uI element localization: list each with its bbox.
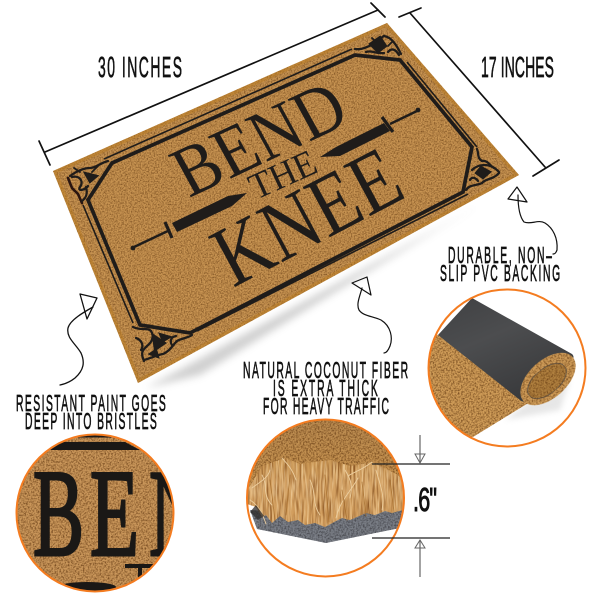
dimension line: 17 inches	[399, 8, 559, 176]
caption: fiber	[243, 357, 408, 419]
title word: KNEE: KNEE	[196, 128, 417, 305]
coir surface	[430, 334, 528, 437]
caption: paint: RESISTANT PAINT GOES	[16, 390, 166, 416]
detail circle: paint lettering	[16, 434, 174, 592]
caption: backing: DURABLE, NON–	[448, 242, 552, 268]
corner ornament bottom left	[133, 327, 192, 361]
label: 30 inches: 30 INCHES	[98, 50, 182, 83]
circle outline	[16, 434, 174, 592]
roll end inner	[526, 362, 567, 400]
upper measure line	[372, 463, 450, 465]
label: 17 inches: 17 INCHES	[481, 50, 554, 83]
dimension line: 30 inches	[39, 3, 385, 165]
printed letters BEN: E	[90, 445, 139, 582]
caption: fiber: FOR HEAVY TRAFFIC	[263, 393, 389, 419]
corner ornament bottom right	[466, 149, 499, 190]
detail circle: coconut fiber thickness	[244, 418, 407, 576]
rubber backing roll	[438, 298, 574, 402]
title word: BEND: BEND	[158, 65, 360, 212]
caption: backing	[440, 242, 560, 286]
caption: paint: DEEP INTO BRISTLES	[25, 408, 157, 434]
gray backing	[250, 510, 402, 543]
corner ornament top left	[68, 161, 108, 203]
title word: THE: THE	[242, 141, 323, 207]
arrow to paint	[60, 294, 97, 385]
fiber pile	[244, 458, 407, 527]
caption: fiber: NATURAL COCONUT FIBER	[243, 357, 408, 383]
thickness measure: .6 inch	[372, 435, 450, 577]
printed letters BEN: B	[33, 445, 84, 582]
doormat	[53, 23, 519, 383]
arrow to fiber	[352, 277, 391, 353]
caption: fiber: IS EXTRA THICK	[273, 375, 378, 401]
blurred top surface	[248, 420, 400, 488]
detail circle: rolled PVC backing	[425, 290, 586, 446]
caption: backing: SLIP PVC BACKING	[440, 260, 560, 286]
dark shadow under pile	[250, 505, 264, 520]
arrow down	[415, 435, 425, 463]
mat surface	[53, 23, 519, 383]
soft shadow under roll	[510, 385, 569, 420]
arrow up	[415, 540, 425, 577]
lower measure line	[372, 537, 450, 539]
thin border lines	[83, 49, 477, 331]
printed border band	[50, 442, 140, 450]
printed sword blade	[64, 582, 116, 590]
printed letter T fragment	[125, 566, 153, 578]
mat drop shadow	[146, 205, 480, 388]
printed letters BEN: N	[149, 445, 209, 582]
label: .6 inch: .6"	[413, 481, 437, 518]
roll end outer	[520, 352, 576, 406]
corner ornament top right	[355, 36, 401, 55]
printed letters BEN	[34, 472, 172, 556]
caption: paint	[16, 390, 166, 434]
arrow to backing	[508, 187, 557, 254]
sword right	[320, 108, 420, 157]
mat edge band	[53, 23, 519, 383]
thick border	[88, 55, 472, 333]
loose fibers	[250, 458, 394, 524]
printed thin band	[78, 436, 112, 438]
circle outline	[428, 290, 586, 446]
circle outline	[247, 420, 404, 576]
sword left	[131, 193, 247, 250]
